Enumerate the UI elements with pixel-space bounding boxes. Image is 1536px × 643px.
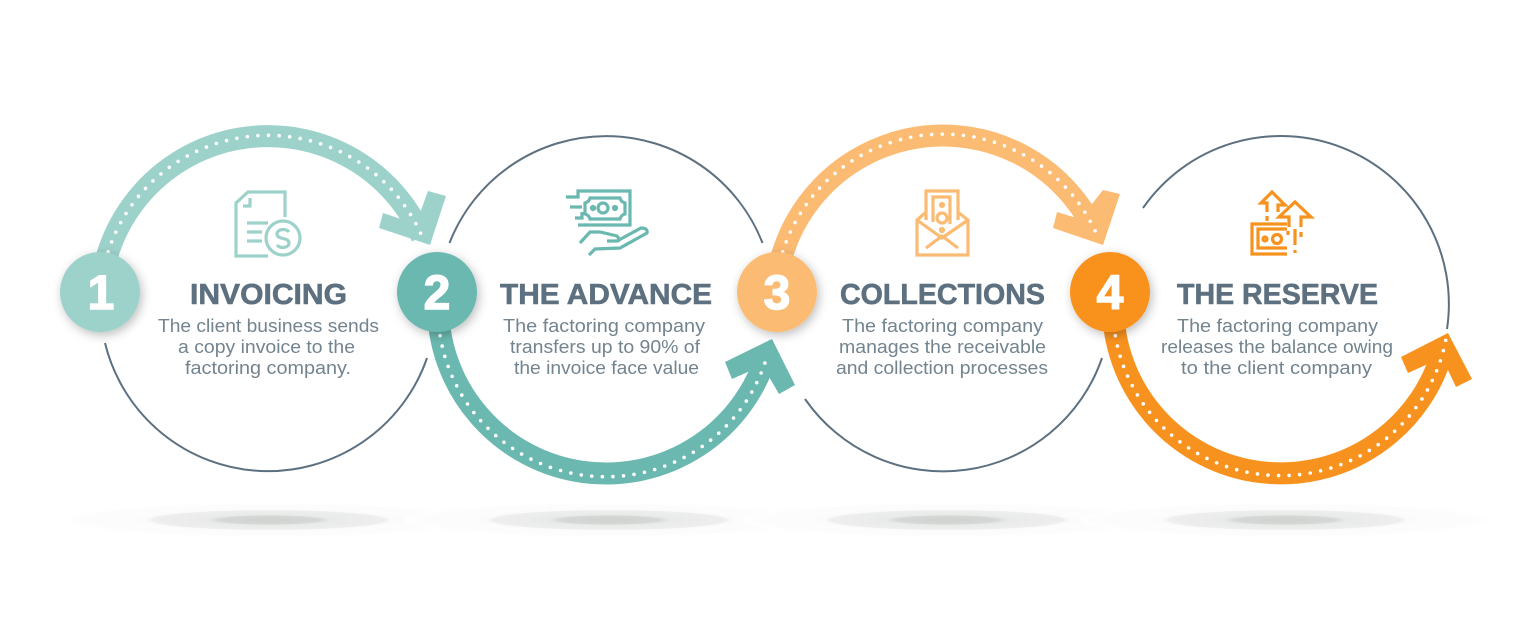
heading: invoicing: INVOICING [190,279,347,311]
badge 1 [60,252,140,332]
badge 2: 2 [424,267,450,320]
icon: envelope with cash [917,191,968,255]
badge 2 [397,252,477,332]
step 2 text [500,279,712,378]
arrow: step 2 to 3 [438,304,795,477]
ring: step 1 [105,343,427,471]
step 4 text: to the client company [1181,357,1373,378]
heading: the reserve: THE RESERVE [1177,279,1378,311]
ring: step 4 [1143,136,1449,329]
step 1 text: The client business sends [158,315,379,336]
step 3 text: and collection processes [836,357,1048,378]
arrow: step 3 to 4 [775,134,1120,304]
step 4 text: The factoring company [1177,315,1379,336]
step 2 text: The factoring company [503,315,706,336]
step 4 text [1161,279,1393,378]
badge 1: 1 [88,267,114,320]
step 4 text: releases the balance owing [1161,336,1393,357]
step 1 text [158,279,379,378]
icon: invoice with dollar coin [236,192,300,256]
ground shadows [64,503,1490,537]
badge 3 [737,252,817,332]
heading: collections: COLLECTIONS [840,279,1045,311]
arrow: step 4 to end [1113,304,1472,476]
badge 3: 3 [764,267,790,320]
icon: cash over open hand [566,191,647,255]
badge 4: 4 [1097,267,1124,320]
icon: cash with rising arrows [1252,192,1311,254]
step 3 text [836,279,1048,378]
step 1 text: factoring company. [185,357,351,378]
heading: the advance: THE ADVANCE [500,279,712,311]
badge 4 [1070,252,1150,332]
ring: step 2 [450,136,762,243]
arrow: step 1 to 2 [100,135,446,304]
ring: step 3 [805,358,1102,471]
step 3 text: manages the receivable [839,336,1046,357]
step 2 text: transfers up to 90% of [510,336,701,357]
step 3 text: The factoring company [842,315,1044,336]
step 2 text: the invoice face value [514,357,699,378]
step 1 text: a copy invoice to the [178,336,355,357]
